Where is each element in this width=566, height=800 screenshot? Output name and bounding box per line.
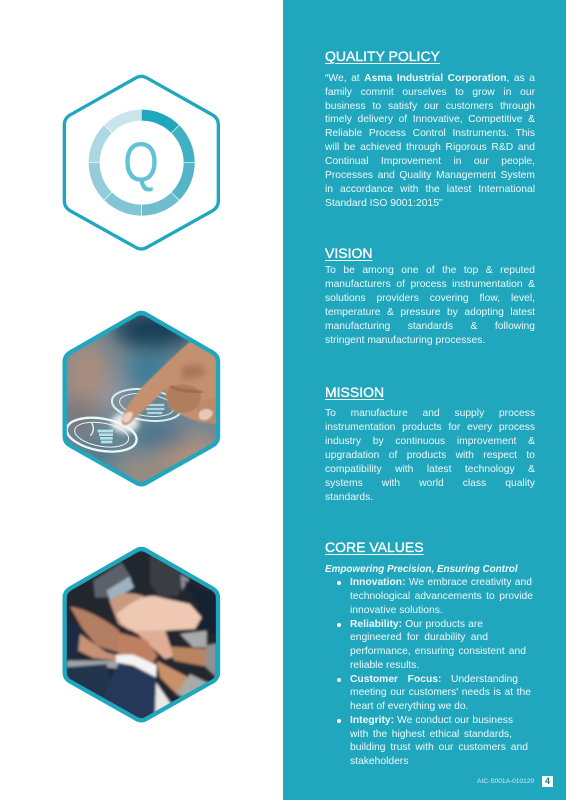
heading: quality policy: QUALITY POLICY: [325, 48, 440, 64]
text block: mission: standards.: [325, 492, 373, 503]
text block: vision: [325, 265, 535, 346]
text block: vision: manufacturers of process instrumentation &: [325, 279, 535, 290]
photo: finger touching holographic icons: [62, 310, 220, 486]
text block: quality policy: will be achieved through Rigorous R&D and: [325, 142, 535, 153]
text block: vision: solutions providers covering flow, level,: [325, 293, 535, 304]
heading: mission: MISSION: [325, 384, 384, 400]
text block: vision: To be among one of the top & reputed: [325, 265, 535, 276]
icon: front holographic ring: [66, 416, 138, 453]
list: core values: engineered for durability and: [350, 632, 488, 643]
text block: quality policy: business to satisfy our customers through: [325, 101, 535, 112]
teal text panel: [283, 0, 566, 800]
hand: [122, 342, 223, 426]
text block: vision: temperature & pressure by adopting latest: [325, 307, 535, 318]
text block: mission: instrumentation products for every process: [325, 422, 535, 433]
tagline: Empowering Precision, Ensuring Control: [325, 564, 518, 575]
text block: quality policy: in accordance with the latest International: [325, 184, 535, 195]
icon: quality hexagon with ring and Q: Q: [123, 131, 159, 193]
footer document code: AIC-S001A-010120: [477, 778, 534, 785]
list: core values: technological advancements to provide: [350, 591, 533, 602]
list: core values: with the highest ethical standards,: [350, 729, 512, 740]
text block: mission: compatibility with latest technology &: [325, 464, 535, 475]
list: core values: Integrity: We conduct our business: [350, 715, 513, 726]
list: core values: building trust with our customers and: [350, 742, 528, 753]
text block: mission: To manufacture and supply process: [325, 408, 535, 419]
text block: mission: industry by continuous improvement &: [325, 436, 535, 447]
list: core values: innovative solutions.: [350, 605, 443, 616]
text block: mission: upgradation of products with respect to: [325, 450, 535, 461]
text block: quality policy: Continual Improvement in our people,: [325, 156, 535, 167]
list: core values: reliable results.: [350, 660, 419, 671]
list: core values: stakeholders: [350, 756, 408, 767]
heading: core values: CORE VALUES: [325, 539, 424, 555]
text block: quality policy: timely delivery of Innovative, Competitive &: [325, 114, 535, 125]
list: core values: meeting our customers' needs is at the: [350, 687, 531, 698]
text block: quality policy: family commit ourselves to grow in our: [325, 87, 535, 98]
text block: quality policy: Reliable Process Control Instruments. This: [325, 128, 535, 139]
photo: team stacking hands: [62, 546, 220, 722]
icon: quality hexagon with ring and Q: [62, 74, 220, 251]
page number box: [542, 776, 553, 787]
text block: vision: stringent manufacturing processes.: [325, 335, 485, 346]
text block: mission: [325, 408, 535, 503]
text block: vision: manufacturing standards & following: [325, 321, 535, 332]
list: core values: performance, ensuring consistent and: [350, 646, 526, 657]
text block: quality policy: [325, 73, 535, 209]
page number box: 4: [545, 776, 550, 786]
text block: quality policy: Standard ISO 9001:2015”: [325, 198, 442, 209]
list: core values: Innovation: We embrace creativity and: [350, 577, 532, 588]
heading: vision: VISION: [325, 245, 372, 261]
text block: quality policy: Processes and Quality Management System: [325, 170, 535, 181]
list: core values: heart of everything we do.: [350, 701, 468, 712]
icon: rear holographic ring: [110, 388, 181, 422]
list: core values: Reliability: Our products are: [350, 619, 483, 630]
text block: quality policy: “We, at Asma Industrial Corporation, as a: [325, 73, 535, 84]
text block: mission: systems with world class quality: [325, 478, 535, 489]
hands: [70, 607, 119, 652]
